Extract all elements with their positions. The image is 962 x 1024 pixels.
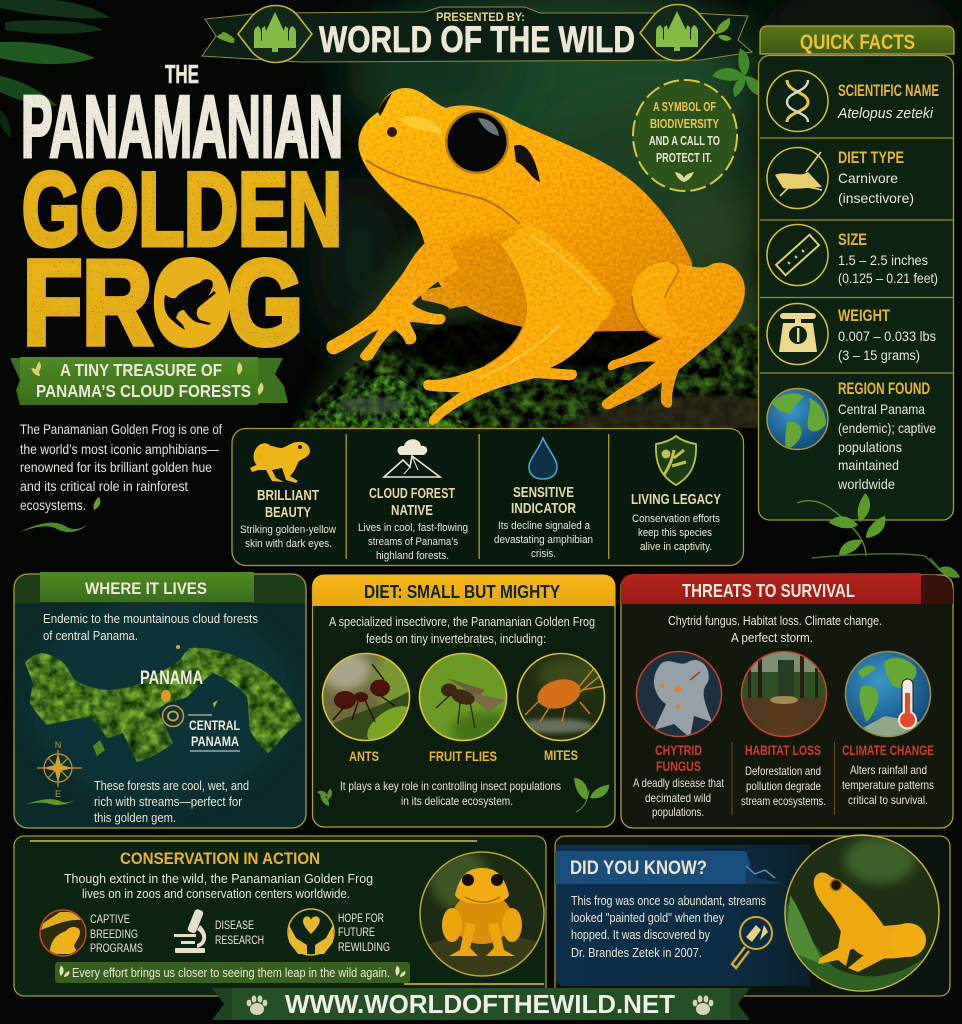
frog photo on mossy rock (290, 88, 765, 430)
frog shadow (390, 317, 690, 373)
label: disease research: RESEARCH (215, 933, 264, 947)
icon: thermometer (899, 679, 916, 728)
trait: cloud forest native: highland forests. (376, 550, 449, 562)
panel: diet: feeds on tiny invertebrates, including: (366, 631, 546, 646)
heading: did you know: DID YOU KNOW? (570, 858, 707, 879)
heading: where it lives (40, 572, 254, 602)
front right leg (423, 222, 614, 425)
fact: size: (0.125 – 0.21 feet) (838, 270, 938, 286)
icon: earth globe (767, 388, 828, 450)
belly shade (440, 234, 620, 332)
trait: brilliant beauty: BEAUTY (265, 505, 311, 521)
fact: weight: 0.007 – 0.033 lbs (838, 328, 936, 344)
rock (290, 320, 760, 430)
trait: cloud forest native: Lives in cool, fast-flowing (358, 522, 468, 534)
right logo badge (640, 4, 715, 60)
trait: brilliant beauty: skin with dark eyes. (245, 538, 332, 550)
compass: E (55, 789, 61, 799)
panel: where it lives: of central Panama. (43, 628, 138, 643)
plant sprig below quick facts (797, 493, 961, 583)
map of Panama (25, 645, 302, 762)
panel: key traits (232, 428, 744, 566)
heading: diet (312, 575, 615, 606)
presenter line: PRESENTED BY: (436, 12, 525, 24)
icon: ruler (767, 224, 828, 286)
label: hope for future rewilding: FUTURE (338, 925, 375, 939)
threat: habitat loss: Deforestation and (745, 764, 821, 778)
frog (326, 88, 745, 425)
icon: cloud and mountains (384, 439, 440, 477)
photo: fruit fly: FRUIT FLIES (429, 749, 497, 764)
label: captive breeding programs: BREEDING (90, 927, 138, 941)
callout: symbol of biodiversity: PROTECT IT. (656, 151, 712, 165)
fact: region found: (endemic); captive (838, 420, 936, 436)
subtitle line two: PANAMA’S CLOUD FORESTS (36, 381, 251, 401)
callout: every effort pill: Every effort brings us closer to seeing them leap in the wild again. (72, 966, 390, 980)
body shading (632, 262, 690, 338)
trait: brilliant beauty (240, 442, 336, 550)
panel: quick facts: QUICK FACTS (800, 31, 915, 54)
label: captive breeding programs (90, 912, 143, 955)
quick facts header (760, 26, 954, 54)
icon: microscope (174, 908, 206, 953)
callout: every effort pill (55, 962, 410, 983)
panel: where it lives: Endemic to the mountainous cloud forests (43, 611, 258, 626)
fact: weight: (3 – 15 grams) (838, 347, 920, 363)
title: golden: GOLDEN (22, 152, 342, 268)
back hidden feet (420, 286, 466, 309)
panel: diet (312, 575, 615, 827)
map of Panama: PANAMA (191, 733, 239, 749)
intro text: ecosystems. (20, 498, 86, 513)
title: panamanian: PANAMANIAN (21, 77, 343, 176)
eye (445, 110, 509, 174)
body (358, 88, 692, 332)
fact: size: SIZE (838, 231, 867, 249)
label: hope for future rewilding: REWILDING (338, 940, 390, 954)
panel: conservation in action: lives on in zoos and conservation centers worldwide. (82, 886, 350, 901)
photo: mite: MITES (544, 748, 578, 763)
threat: climate change: Alters rainfall and (850, 763, 927, 777)
ribbon sprigs (31, 361, 266, 396)
title (21, 59, 343, 370)
fact: scientific name (767, 70, 939, 132)
left logo badge (238, 6, 312, 62)
icon: water drop (529, 438, 557, 479)
label: Panama: PANAMA (140, 668, 203, 689)
fact: weight: WEIGHT (838, 307, 890, 325)
panel: did you know: This frog was once so abundant, streams (571, 893, 766, 908)
heading: threats (621, 573, 953, 604)
intro text: the world’s most iconic amphibians— (20, 442, 219, 457)
frog silhouette in the letter O (154, 257, 230, 347)
fact: region found: Central Panama (838, 401, 925, 417)
threat: chytrid fungus: A deadly disease that (633, 776, 725, 790)
intro text: renowned for its brilliant golden hue (20, 460, 212, 475)
threat: habitat loss: pollution degrade (746, 779, 821, 793)
label: captive breeding programs: PROGRAMS (90, 941, 143, 955)
threat: chytrid fungus (633, 650, 725, 819)
photo: ant (322, 652, 410, 761)
fact: region found: maintained (838, 457, 899, 473)
label: central Panama: CENTRAL (189, 717, 240, 733)
threat: habitat loss (740, 650, 830, 808)
icon: right paw (693, 995, 713, 1015)
footer ribbon (212, 988, 750, 1020)
trait: cloud forest native (358, 439, 468, 562)
icon: left sprig (317, 788, 334, 808)
photo: frog on leaf (785, 835, 941, 991)
intro text: and its critical role in rainforest (20, 479, 188, 494)
panel: where it lives: this golden gem. (94, 810, 176, 825)
threat: chytrid fungus: decimated wild (645, 791, 711, 805)
brand name: WORLD OF THE WILD (319, 19, 635, 60)
panel: did you know: hopped. It was discovered by (571, 927, 710, 942)
callout: symbol of biodiversity (633, 80, 737, 191)
compass: N (55, 740, 61, 750)
panel: diet: A specialized insectivore, the Panamanian Golden Frog (329, 614, 595, 629)
title: the: THE (165, 59, 199, 89)
trait: living legacy: alive in captivity. (640, 541, 712, 553)
threat: climate change: critical to survival. (848, 793, 928, 807)
fact: region found (767, 380, 936, 492)
icon: DNA helix (767, 70, 828, 132)
panel: did you know: looked "painted gold" when they (571, 910, 724, 925)
heading: threats: THREATS TO SURVIVAL (682, 581, 855, 601)
photo: ant: ANTS (349, 749, 379, 764)
fact: region found: populations (838, 439, 902, 455)
panel: conservation in action (14, 836, 546, 996)
panel: threats: Chytrid fungus. Habitat loss. Climate change. (668, 613, 882, 628)
trait: sensitive indicator: SENSITIVE (513, 485, 574, 501)
panel: conservation in action: Though extinct in the wild, the Panamanian Golden Frog (64, 871, 373, 886)
threat: habitat loss: stream ecosystems. (741, 794, 826, 808)
panel: quick facts (758, 26, 954, 520)
subtitle line one: A TINY TREASURE OF (60, 360, 222, 380)
photo: fruit fly (418, 652, 508, 761)
trait: sensitive indicator (494, 438, 593, 560)
label: hope for future rewilding (338, 911, 390, 954)
threat: climate change: temperature patterns (842, 778, 934, 792)
heading: where it lives: WHERE IT LIVES (85, 579, 207, 598)
trait: living legacy: Conservation efforts (632, 513, 720, 525)
trait: sensitive indicator: devastating amphibian (494, 534, 593, 546)
intro text: The Panamanian Golden Frog is one of (20, 422, 222, 437)
thigh and hind foot (660, 370, 679, 408)
trait: sensitive indicator: INDICATOR (511, 501, 576, 517)
trait: sensitive indicator: Its decline signaled a (498, 520, 591, 532)
threat: climate change (842, 651, 934, 807)
fact: diet type: DIET TYPE (838, 149, 904, 167)
trait: brilliant beauty: BRILLIANT (257, 488, 319, 504)
heading: did you know (555, 851, 785, 884)
hanging vine leaves (712, 48, 769, 102)
threat: chytrid fungus: CHYTRID (655, 742, 702, 758)
panel: threats (621, 573, 953, 828)
panel: conservation in action: CONSERVATION IN ACTION (120, 849, 320, 868)
callout: symbol of biodiversity: BIODIVERSITY (650, 117, 720, 131)
icon: left paw (247, 995, 267, 1015)
jungle leaves top left (0, 0, 110, 138)
photo: frog front view (420, 850, 545, 976)
icon: golden frog (250, 442, 310, 483)
icon: magnifying glass (732, 917, 772, 968)
head details (378, 93, 392, 116)
fact: region found: worldwide (837, 476, 895, 492)
icon: caring hands (288, 909, 334, 955)
heading: diet: DIET: SMALL BUT MIGHTY (364, 582, 560, 602)
panel: where it lives (14, 572, 306, 828)
label: disease research (215, 918, 264, 947)
fact: weight (767, 304, 936, 364)
fact: diet type: (insectivore) (838, 190, 914, 206)
panel: threats: A perfect storm. (731, 630, 813, 645)
panel: did you know (555, 835, 950, 996)
icon: scale (767, 304, 828, 364)
fact: scientific name: Atelopus zeteki (837, 105, 934, 122)
panel: did you know: Dr. Brandes Zetek in 2007. (571, 945, 702, 960)
fact: diet type (767, 148, 914, 208)
trait: cloud forest native: NATIVE (391, 503, 433, 519)
trait: cloud forest native: CLOUD FOREST (369, 486, 455, 502)
icon: right sprig (574, 776, 612, 812)
panel: diet: It plays a key role in controlling insect populations (340, 779, 561, 793)
callout: symbol of biodiversity: AND A CALL TO (649, 134, 720, 148)
icon: shield (656, 436, 696, 485)
trait: living legacy: keep this species (638, 527, 712, 539)
fact: size: 1.5 – 2.5 inches (838, 252, 928, 268)
trait: brilliant beauty: Striking golden-yellow (240, 524, 336, 536)
panel: diet: in its delicate ecosystem. (401, 794, 513, 808)
website url: WWW.WORLDOFTHEWILD.NET (285, 989, 675, 1019)
title: frog: FROG (23, 236, 303, 370)
panel: where it lives: rich with streams—perfect for (94, 794, 243, 809)
misty moss background (306, 214, 758, 409)
threat: chytrid fungus: FUNGUS (656, 758, 701, 774)
front left leg (326, 238, 460, 361)
subtitle ribbon (10, 357, 288, 405)
callout: symbol of biodiversity: A SYMBOL OF (653, 100, 716, 114)
label: hope for future rewilding: HOPE FOR (338, 911, 384, 925)
icon: captive breeding (40, 910, 86, 956)
label: captive breeding programs: CAPTIVE (90, 912, 130, 926)
trait: living legacy (631, 436, 721, 553)
icon: grasshopper (767, 148, 828, 208)
intro text (20, 422, 222, 532)
dark mark behind eye (514, 145, 540, 182)
photo: mite (516, 652, 606, 763)
header banner (202, 4, 752, 62)
fact: diet type: Carnivore (838, 170, 898, 186)
banner leaves (216, 18, 734, 46)
trait: cloud forest native: streams of Panama’s (368, 536, 458, 548)
trait: living legacy: LIVING LEGACY (631, 492, 721, 508)
panel: where it lives: These forests are cool, wet, and (94, 778, 249, 793)
threat: habitat loss: HABITAT LOSS (745, 742, 821, 758)
threat: chytrid fungus: populations. (652, 805, 704, 819)
trait: sensitive indicator: crisis. (531, 548, 556, 560)
fact: size (767, 224, 938, 286)
label: disease research: DISEASE (215, 918, 254, 932)
compass (37, 740, 82, 799)
